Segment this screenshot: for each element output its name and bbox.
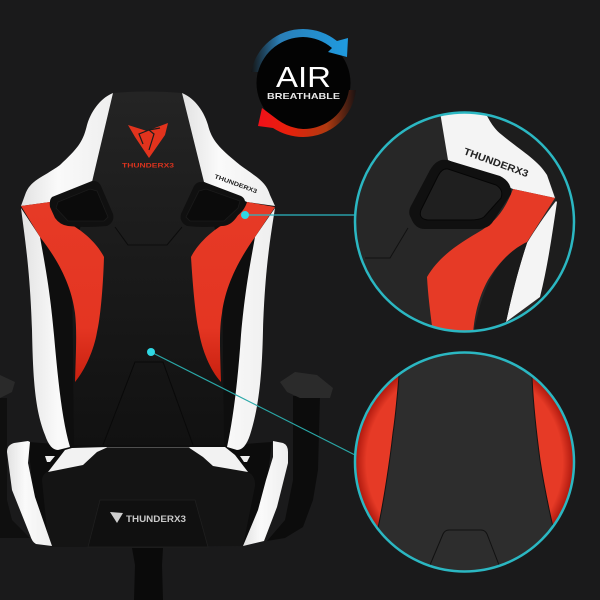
seat label patch bbox=[88, 500, 208, 547]
badge disc bbox=[256, 36, 350, 130]
bracket bbox=[409, 160, 511, 229]
white shoulder bbox=[440, 112, 555, 198]
seat white strip left bbox=[48, 447, 108, 472]
panel: air badge bbox=[251, 29, 356, 137]
right white bolster bbox=[182, 93, 275, 450]
icon: seat logo bbox=[110, 512, 123, 523]
callout line: back bbox=[151, 352, 355, 455]
callout dot: shoulder bbox=[241, 211, 249, 219]
panel: seat bbox=[7, 441, 288, 547]
centre panel bbox=[72, 92, 224, 445]
shoulder brand text: THUNDERX3 bbox=[213, 174, 258, 196]
icon: red arrow bbox=[258, 90, 356, 137]
icon: red logo bbox=[128, 123, 168, 158]
lumbar seam bbox=[103, 362, 193, 445]
black mesh panel bbox=[474, 242, 527, 332]
seat side frame bbox=[28, 442, 272, 546]
right bolster bbox=[243, 441, 288, 546]
callout dot: back bbox=[147, 348, 155, 356]
left armrest bbox=[0, 375, 30, 538]
red panels detail bbox=[356, 376, 573, 527]
left bolster bbox=[7, 441, 52, 546]
left red panel bbox=[21, 202, 104, 382]
panel: chair back bbox=[21, 92, 275, 450]
detail brand text: THUNDERX3 bbox=[462, 146, 530, 180]
back silhouette bbox=[21, 93, 275, 450]
panel: shoulder detail circle bbox=[350, 110, 580, 335]
AIR label: AIR bbox=[276, 62, 331, 94]
seat brand text: THUNDERX3 bbox=[126, 514, 186, 525]
chair base post bbox=[132, 548, 163, 600]
red brand text: THUNDERX3 bbox=[122, 162, 174, 170]
white side bbox=[506, 201, 557, 322]
left white bolster bbox=[21, 93, 113, 450]
seat white strip right bbox=[188, 447, 248, 472]
right armrest bbox=[267, 372, 333, 541]
icon: blue arrow bbox=[251, 29, 348, 72]
left shoulder bracket bbox=[50, 181, 113, 227]
callout line: shoulder bbox=[245, 214, 356, 216]
right red panel bbox=[191, 202, 275, 382]
right shoulder bracket bbox=[181, 182, 245, 227]
seat cushion bbox=[42, 447, 255, 547]
BREATHABLE label: BREATHABLE bbox=[267, 91, 340, 101]
red panel bbox=[427, 189, 555, 335]
panel: back mesh detail circle bbox=[354, 351, 576, 573]
